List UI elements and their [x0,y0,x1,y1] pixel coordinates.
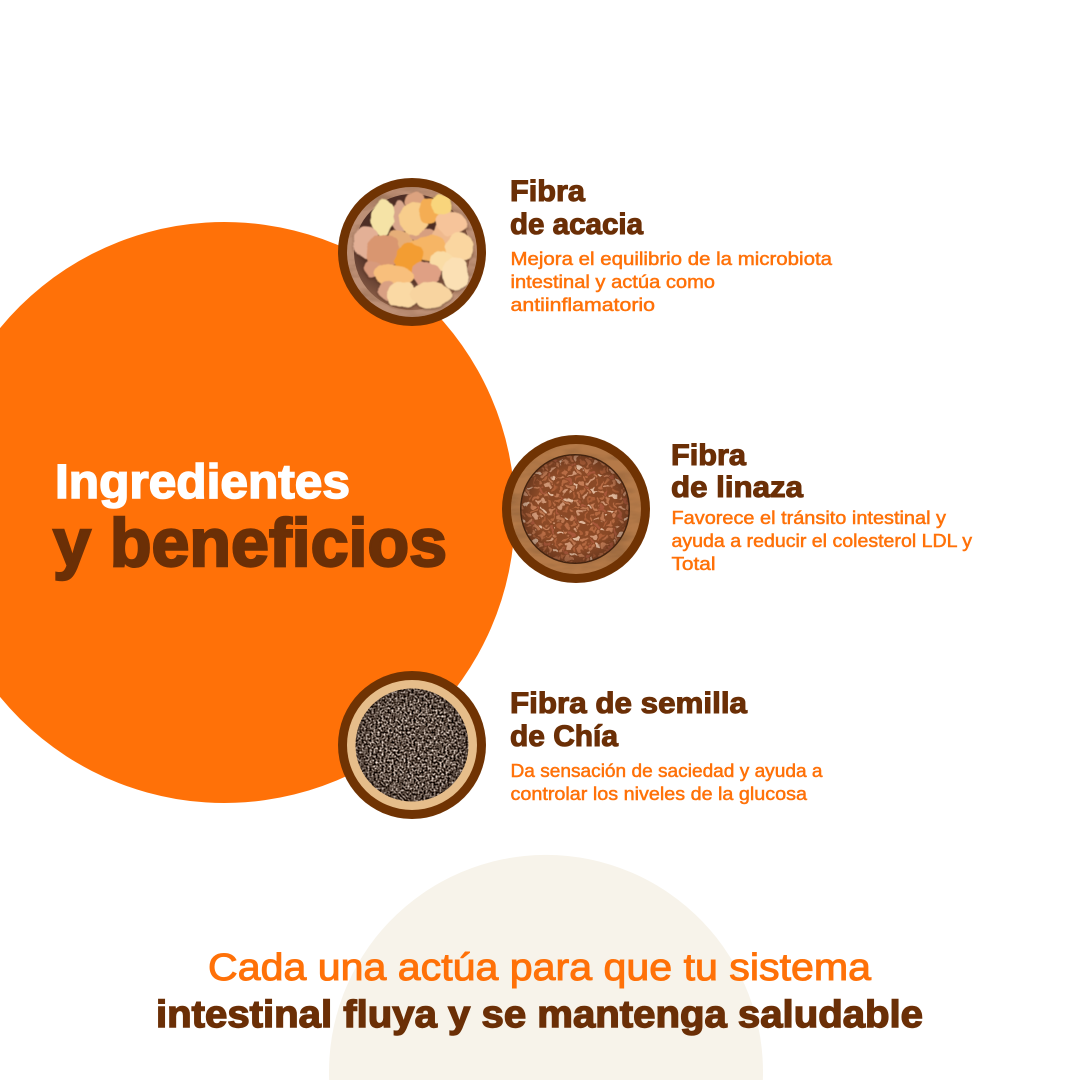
title: Ingredientes [55,456,350,509]
icon: bowl of acacia fiber [338,178,486,326]
text block: fibra de acacia: de acacia [510,208,643,241]
icon: bowl of flax seed [502,435,650,583]
text block: fibra de linaza: ayuda a reducir el colesterol LDL y [672,530,973,551]
text block: fibra de acacia: Fibra [510,175,585,208]
title [53,456,447,581]
text block: fibra de linaza: Total [672,553,716,574]
closing statement [156,947,923,1036]
main orange circle [0,222,515,803]
text block: fibra de acacia [510,175,833,315]
background circle: beige [329,855,763,1080]
text block: fibra de acacia: intestinal y actúa como [510,271,715,292]
title: y beneficios [53,505,447,581]
icon: bowl of chia seed [338,671,486,819]
text block: fibra de acacia: Mejora el equilibrio de la microbiota [510,248,833,269]
text block: fibra de linaza: Fibra [671,439,746,472]
text block: fibra de semilla de chia: Fibra de semilla [510,687,747,720]
closing statement: intestinal fluya y se mantenga saludable [156,994,923,1036]
text block: fibra de semilla de chia: de Chía [510,720,618,753]
text block: fibra de semilla de chia [510,687,823,804]
text block: fibra de linaza: de linaza [671,471,803,504]
text block: fibra de semilla de chia: controlar los niveles de la glucosa [510,783,808,804]
text block: fibra de linaza [671,439,973,574]
closing statement: Cada una actúa para que tu sistema [208,947,872,989]
text block: fibra de semilla de chia: Da sensación de saciedad y ayuda a [510,760,823,781]
text block: fibra de linaza: Favorece el tránsito intestinal y [672,507,947,528]
text block: fibra de acacia: antiinflamatorio [510,294,655,315]
